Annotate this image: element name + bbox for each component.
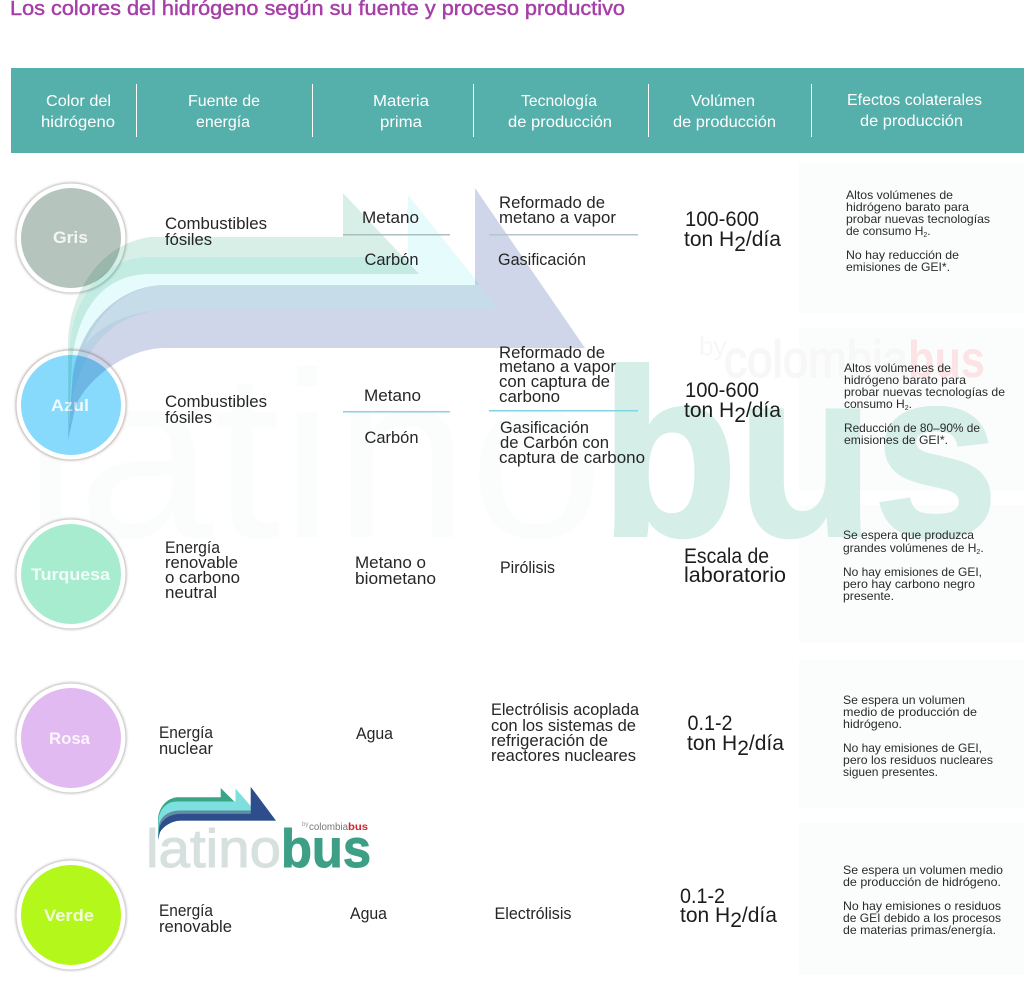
raw materials: Carbón	[364, 428, 418, 447]
table header: prima	[380, 114, 422, 131]
production technology: con captura de	[499, 372, 610, 391]
table header: Tecnología	[521, 93, 597, 110]
side effects: No hay emisiones de GEI,	[843, 741, 982, 755]
side effects: 2	[976, 549, 980, 556]
energy source	[159, 723, 214, 758]
production technology	[489, 193, 638, 269]
production technology: refrigeración de	[491, 731, 608, 750]
production volume: 0.1-2	[688, 712, 732, 735]
side effects: hidrógeno.	[843, 717, 902, 731]
circle: Gris: Gris	[53, 228, 88, 247]
row: Azul	[165, 343, 1005, 467]
side effects: No hay emisiones o residuos	[843, 899, 1001, 913]
logo: latinobus: latino	[146, 819, 281, 879]
side effects	[846, 188, 990, 274]
table header: de producción	[860, 113, 963, 130]
circle: Verde: Verde	[44, 906, 94, 925]
production volume: 0.1-2	[680, 885, 725, 908]
side effects: pero hay carbono negro	[843, 577, 975, 591]
raw materials	[355, 553, 436, 588]
table header: energía	[196, 114, 250, 131]
circle: Azul: Azul	[51, 396, 89, 415]
production technology: Reformado de	[499, 343, 605, 362]
raw material: Agua	[350, 904, 388, 923]
table header: hidrógeno	[41, 114, 115, 131]
production volume: 2	[730, 909, 742, 932]
production technology: Pirólisis	[500, 558, 555, 577]
circle: Azul	[16, 350, 126, 460]
watermark: latinobus by colombiabus: bus	[908, 331, 985, 389]
production technology: Electrólisis acoplada	[491, 700, 640, 719]
production technology: Gasificación	[500, 418, 589, 437]
production technology: Reformado de	[499, 193, 605, 212]
circle: Verde	[16, 860, 126, 970]
side effects: siguen presentes.	[843, 765, 938, 779]
production technology: con los sistemas de	[491, 716, 636, 735]
table header: de producción	[508, 114, 612, 131]
logo: latinobus: bus	[348, 822, 368, 833]
production volume: 100-600	[685, 208, 759, 231]
hydrogen color circles	[16, 182, 126, 970]
side effects: hidrógeno barato para	[846, 200, 969, 214]
side effects: Se espera que produzca	[843, 528, 974, 542]
effects column background panels	[799, 163, 1024, 975]
side effects: probar nuevas tecnologías de	[844, 385, 1005, 399]
side effects: grandes volúmenes de H	[843, 541, 976, 555]
production technology: Gasificación	[498, 250, 586, 269]
energy source: Energía	[165, 538, 221, 557]
table header: Color del	[46, 93, 111, 110]
production technology	[489, 343, 645, 467]
energy source	[165, 392, 267, 427]
row: Rosa	[159, 693, 993, 779]
production volume: /día	[742, 904, 777, 927]
raw materials: Metano	[364, 386, 421, 405]
production volume: /día	[746, 228, 781, 251]
production volume: 2	[734, 233, 746, 256]
circle: Turquesa	[16, 518, 126, 630]
side effects: 2	[905, 405, 909, 412]
side effects: consumo H	[844, 397, 905, 411]
production volume	[684, 208, 781, 256]
watermark: latinobus by colombiabus: bus	[601, 322, 998, 586]
table header: Volúmen	[691, 93, 755, 110]
side effects: No hay reducción de	[846, 248, 959, 262]
row: Turquesa	[165, 528, 984, 603]
energy source: Energía	[159, 901, 214, 920]
side effects: de producción de hidrógeno.	[843, 875, 1001, 889]
production volume: 2	[734, 404, 746, 427]
table header: Materia	[373, 93, 429, 110]
side effects: Altos volúmenes de	[846, 188, 953, 202]
side effects: medio de producción de	[843, 705, 977, 719]
production volume: /día	[746, 399, 781, 422]
energy source: Energía	[159, 723, 214, 742]
table header: Fuente de	[188, 93, 260, 110]
logo: latinobus: colombia	[309, 822, 348, 833]
energy source: fósiles	[165, 408, 212, 427]
logo: latinobus: by	[302, 822, 308, 828]
watermark: latinobus by colombiabus: by	[699, 331, 726, 361]
side effects	[844, 361, 1005, 447]
production volume: ton H	[684, 399, 734, 422]
raw materials	[343, 208, 450, 269]
production technology: de Carbón con	[500, 433, 609, 452]
circle: Turquesa: Turquesa	[31, 565, 111, 584]
circle: Gris	[16, 182, 126, 294]
side effects: Se espera un volumen medio	[843, 863, 1003, 877]
production volume: ton H	[687, 732, 737, 755]
circle: Rosa: Rosa	[49, 729, 91, 748]
side effects	[843, 693, 993, 779]
circle: Rosa	[16, 682, 126, 794]
energy source: Combustibles	[165, 214, 267, 233]
production technology: Electrólisis	[494, 904, 572, 923]
table header: Efectos colaterales	[847, 92, 982, 109]
production volume: Escala de	[684, 545, 769, 568]
production technology: reactores nucleares	[491, 746, 636, 765]
energy source: fósiles	[165, 230, 212, 249]
watermark: latinobus by colombiabus: colombia	[724, 331, 908, 389]
energy source: renovable	[159, 917, 232, 936]
production volume: laboratorio	[684, 564, 786, 587]
side effects: Altos volúmenes de	[844, 361, 951, 375]
side effects: probar nuevas tecnologías	[846, 212, 990, 226]
energy source	[159, 901, 232, 936]
production technology: metano a vapor	[499, 208, 616, 227]
side effects: emisiones de GEI*.	[844, 433, 948, 447]
production volume	[684, 379, 781, 427]
energy source: Combustibles	[165, 392, 267, 411]
raw materials: Metano o	[355, 553, 426, 572]
raw material: Agua	[356, 724, 394, 743]
side effects	[843, 528, 984, 603]
production volume: 2	[737, 737, 749, 760]
raw materials: Carbón	[364, 250, 418, 269]
side effects: de materias primas/energía.	[843, 923, 996, 937]
energy source: neutral	[165, 583, 217, 602]
side effects: de GEI debido a los procesos	[843, 911, 1001, 925]
logo: latinobus	[146, 787, 371, 879]
side effects: hidrógeno barato para	[844, 373, 966, 387]
energy source	[165, 214, 267, 249]
side effects: .	[909, 397, 912, 411]
side effects: presente.	[843, 589, 894, 603]
watermark: latinobus by colombiabus: latino	[24, 324, 604, 588]
side effects: Se espera un volumen	[843, 693, 965, 707]
side effects: pero los residuos nucleares	[843, 753, 993, 767]
table header: de producción	[673, 114, 776, 131]
production technology: metano a vapor	[499, 357, 616, 376]
production technology	[491, 700, 640, 765]
energy source	[165, 538, 240, 602]
production technology: captura de carbono	[499, 448, 645, 467]
watermark: latinobus by colombiabus	[24, 322, 998, 588]
watermark arrows from logo	[68, 188, 585, 440]
raw materials	[343, 386, 450, 447]
production volume	[684, 545, 786, 587]
energy source: o carbono	[165, 568, 240, 587]
production volume: ton H	[680, 904, 730, 927]
production technology: carbono	[499, 387, 560, 406]
side effects: No hay emisiones de GEI,	[843, 565, 982, 579]
row: Gris	[165, 188, 990, 274]
side effects: de consumo H	[846, 224, 923, 238]
row: Verde	[159, 863, 1003, 937]
side effects: .	[927, 224, 931, 238]
side effects: emisiones de GEI*.	[846, 260, 950, 274]
production volume: ton H	[684, 228, 734, 251]
production volume: /día	[749, 732, 784, 755]
production volume	[687, 712, 784, 760]
energy source: renovable	[165, 553, 238, 572]
side effects: Reducción de 80–90% de	[844, 421, 980, 435]
side effects	[843, 863, 1003, 937]
side effects: .	[980, 541, 984, 555]
side effects: 2	[923, 232, 927, 239]
table header	[11, 68, 1024, 153]
energy source: nuclear	[159, 739, 213, 758]
production volume	[680, 885, 777, 932]
production volume: 100-600	[685, 379, 759, 402]
raw materials: Metano	[362, 208, 419, 227]
logo arrows	[158, 787, 276, 840]
raw materials: biometano	[355, 569, 436, 588]
logo: latinobus: bus	[281, 819, 371, 879]
